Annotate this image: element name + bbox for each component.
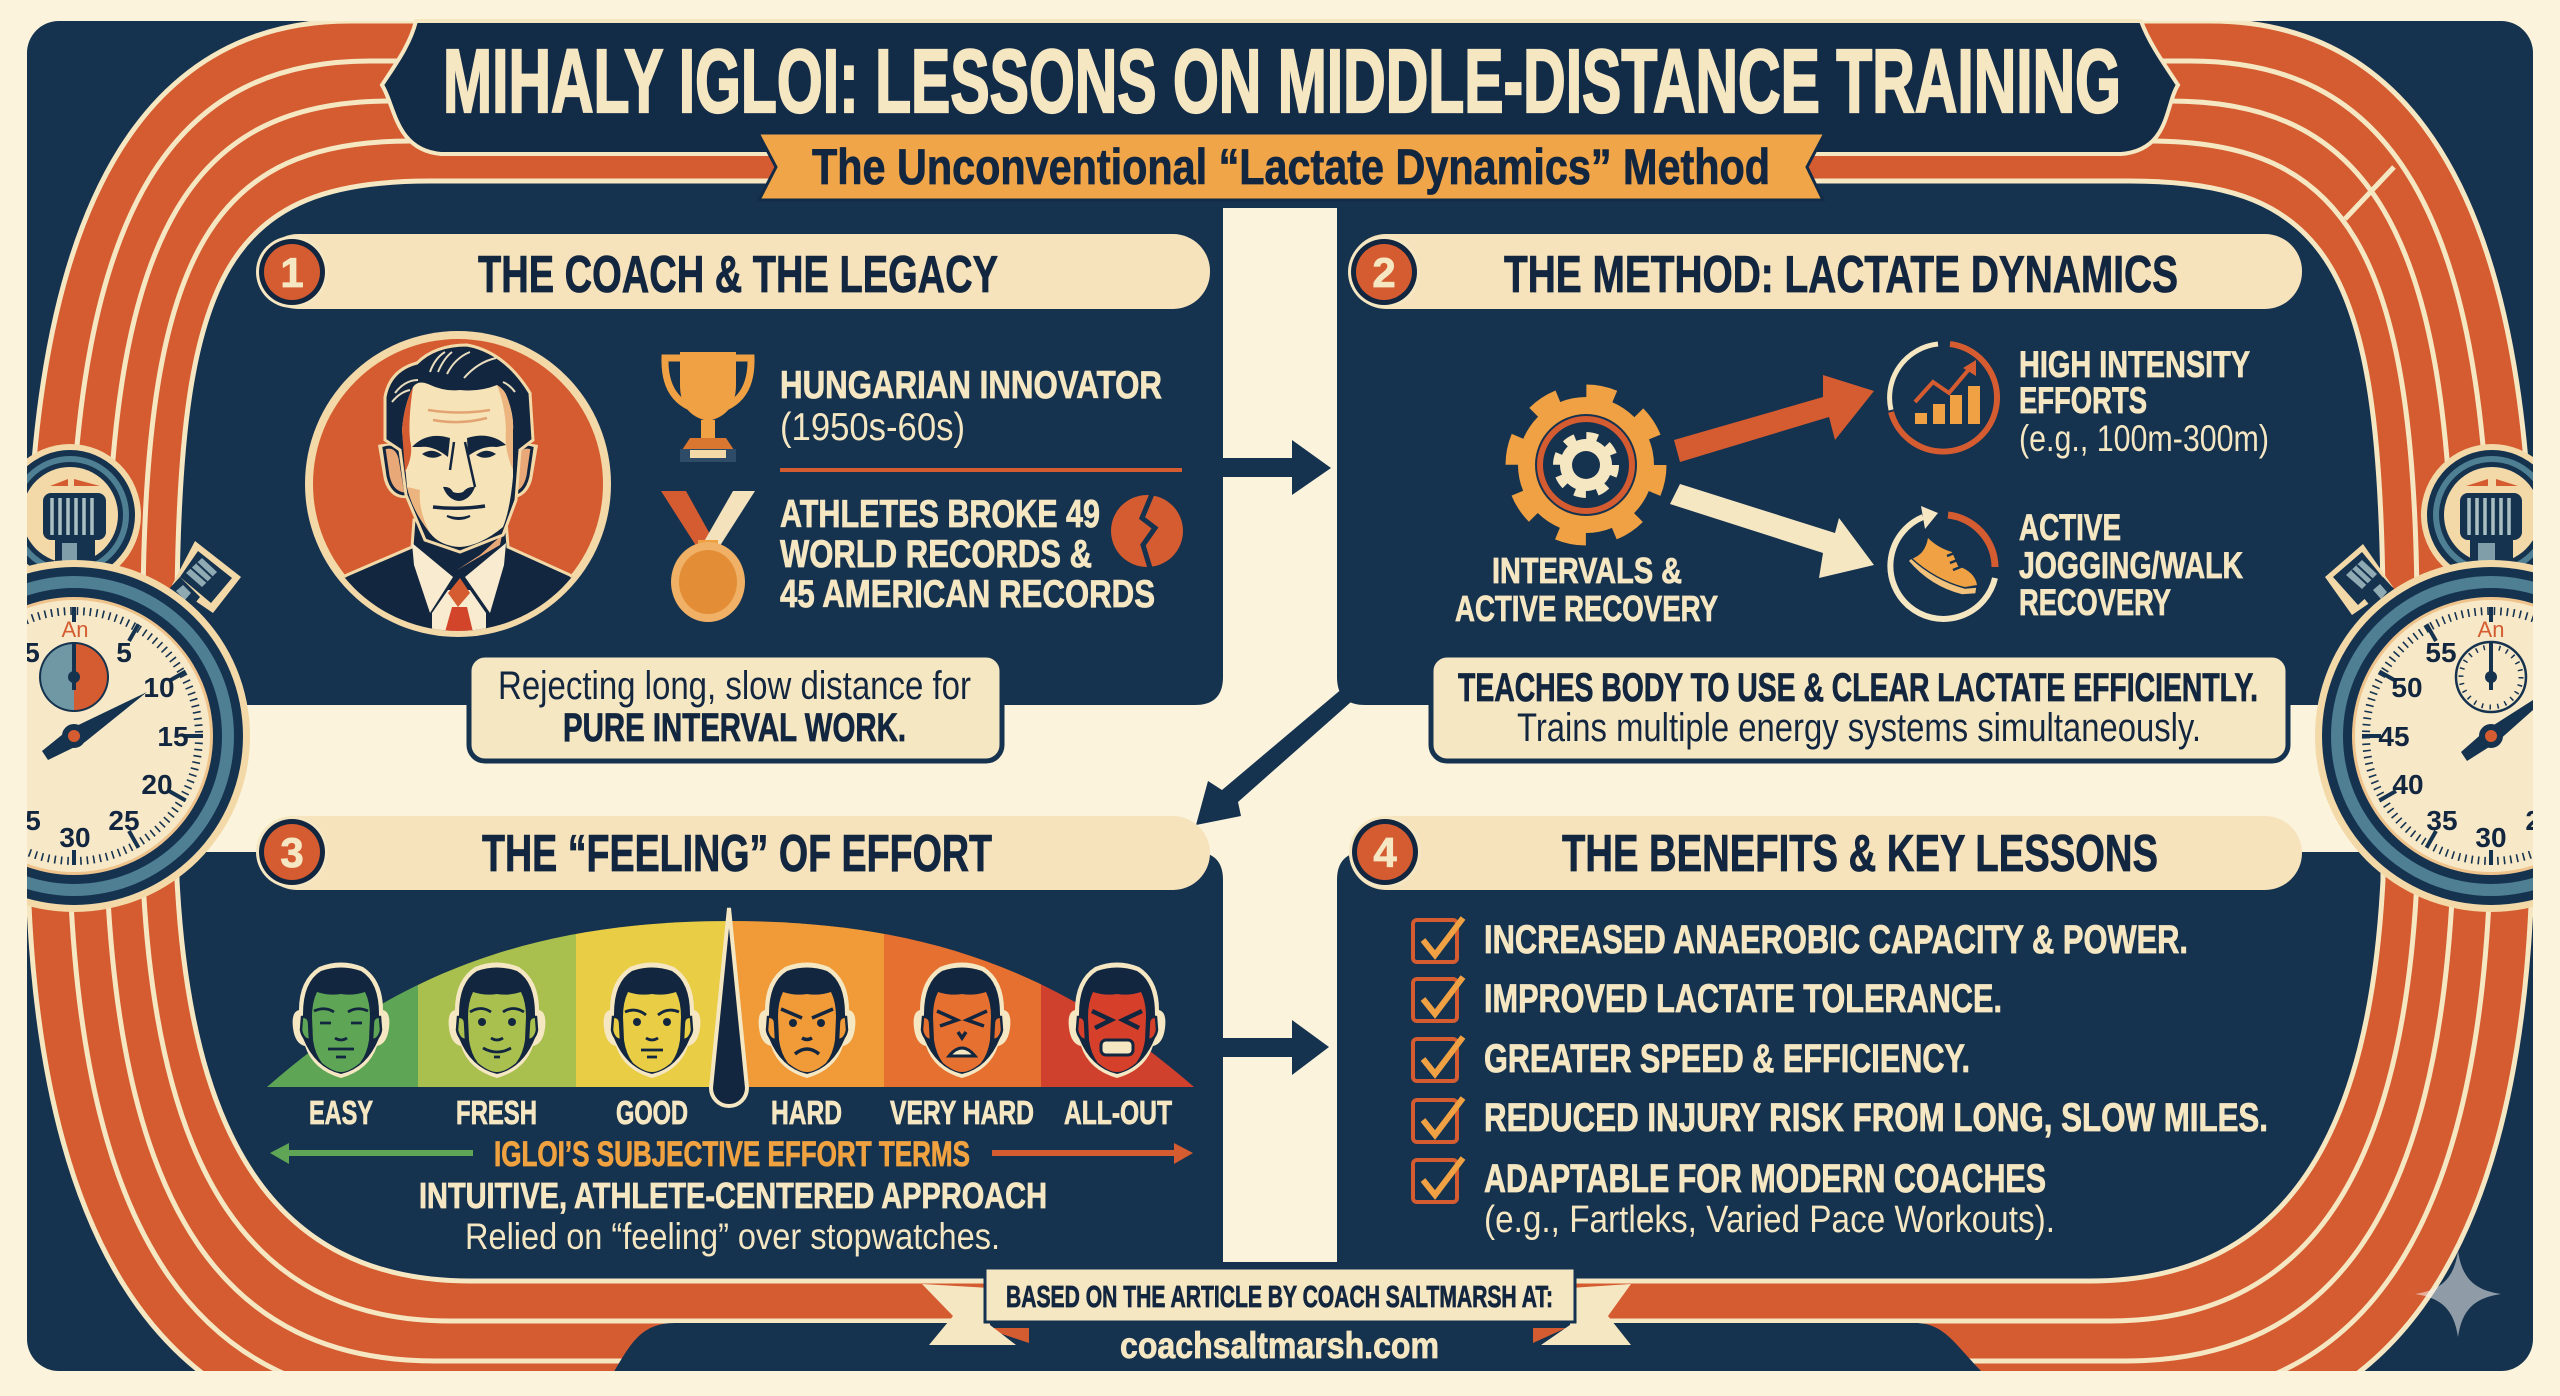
effort labels: ALL-OUT: [1064, 1094, 1172, 1131]
effort gauge: [267, 908, 1194, 1106]
title banner: [382, 21, 2178, 154]
dial numbers: 5: [24, 637, 40, 668]
gear caption: [1455, 550, 1718, 629]
callout: pure interval work: PURE INTERVAL WORK.: [563, 706, 906, 750]
benefit 5: (e.g., Fartleks, Varied Pace Workouts).: [1484, 1199, 2055, 1241]
text: high intensity efforts: HIGH INTENSITY: [2019, 344, 2250, 385]
callout: clear lactate: TEACHES BODY TO USE & CLEAR LACTATE EFFICIENTLY.: [1458, 666, 2258, 710]
divider rule: [780, 468, 1182, 472]
text: high intensity efforts: (e.g., 100m-300m): [2019, 418, 2269, 459]
callout: pure interval work: Rejecting long, slow distance for: [498, 664, 971, 708]
approach text: INTUITIVE, ATHLETE-CENTERED APPROACH: [419, 1175, 1047, 1216]
fact: records broken: WORLD RECORDS &: [780, 533, 1092, 576]
side button: [168, 541, 241, 613]
heading: section 1: 1: [280, 249, 304, 296]
dial numbers: 55: [2425, 637, 2457, 668]
text: active recovery: RECOVERY: [2019, 582, 2171, 623]
text: high intensity efforts: EFFORTS: [2019, 380, 2147, 421]
side button: [2325, 544, 2395, 615]
sparkle watermark: [2415, 1251, 2501, 1337]
subtitle ribbon: [758, 133, 1825, 200]
face: easy: [293, 962, 389, 1078]
dial numbers: 25: [2525, 805, 2557, 836]
cream cross divider: [170, 208, 2400, 1262]
panel: the method, lactate dynamics: [1337, 234, 2337, 764]
heading: section 1: THE COACH & THE LEGACY: [478, 246, 998, 304]
effort labels: GOOD: [616, 1094, 688, 1131]
dial numbers: 5: [116, 637, 132, 668]
heading: section 2: 2: [1372, 249, 1396, 296]
text: high intensity efforts: [2019, 344, 2269, 459]
panel: benefits and key lessons: [1337, 816, 2367, 1266]
arrow: easier: [270, 1143, 473, 1164]
dial numbers: 50: [2391, 672, 2423, 703]
arrow: to active recovery: [1670, 484, 1874, 578]
arrow: harder: [992, 1143, 1193, 1164]
callout: clear lactate: Trains multiple energy systems simultaneously.: [1517, 706, 2201, 750]
left stopwatch: [27, 444, 250, 912]
watch body: [27, 560, 250, 912]
fact: records broken: ATHLETES BROKE 49: [780, 493, 1100, 536]
dial numbers: 45: [2378, 721, 2410, 752]
benefit 3: GREATER SPEED & EFFICIENCY.: [1484, 1037, 1970, 1081]
portrait of Igloi: [305, 331, 611, 650]
text: active recovery: JOGGING/WALK: [2019, 545, 2243, 586]
arrow: to high intensity: [1674, 375, 1874, 462]
subtitle text: The Unconventional “Lactate Dynamics” Method: [812, 139, 1770, 195]
benefit 2: IMPROVED LACTATE TOLERANCE.: [1484, 977, 2002, 1021]
icon: gear: [1515, 394, 1657, 536]
dial numbers: 15: [157, 721, 189, 752]
dial numbers: 40: [2392, 769, 2424, 800]
gear caption: INTERVALS &: [1492, 550, 1682, 591]
sub dial: [39, 617, 109, 712]
footer ribbon: [922, 1268, 1631, 1366]
face: good: [604, 962, 700, 1078]
face: fresh: [449, 962, 545, 1078]
crown: [2421, 444, 2533, 566]
dial numbers: [2378, 643, 2533, 848]
panel: the coach and the legacy: [230, 234, 1223, 764]
ribbon panel: [985, 1268, 1575, 1322]
needle: [2461, 700, 2533, 761]
approach text: Relied on “feeling” over stopwatches.: [465, 1216, 1000, 1257]
fact: records broken: [780, 493, 1155, 616]
heading: section 4: 4: [1373, 829, 1397, 876]
approach text: [419, 1175, 1047, 1257]
heading: section 2: THE METHOD: LACTATE DYNAMICS: [1504, 246, 2178, 304]
needle: [42, 692, 147, 760]
dial numbers: 20: [141, 769, 173, 800]
dial numbers: 35: [2426, 805, 2458, 836]
right stopwatch: [2315, 444, 2533, 912]
text: active recovery: [2019, 507, 2243, 623]
icon: rising chart: [1890, 344, 1997, 452]
benefit 2: [1413, 977, 2002, 1021]
dial numbers: 30: [59, 822, 91, 853]
heading: section 1: [256, 234, 1210, 309]
scale caption: IGLOI’S SUBJECTIVE EFFORT TERMS: [494, 1135, 970, 1174]
icon: medal: [661, 491, 755, 622]
effort labels: [309, 1094, 1172, 1131]
gear caption: ACTIVE RECOVERY: [1455, 588, 1718, 629]
needle: [711, 908, 747, 1106]
benefit 3: [1413, 1037, 1970, 1081]
dial numbers: 25: [108, 805, 140, 836]
ribbon panel: BASED ON THE ARTICLE BY COACH SALTMARSH AT:: [1006, 1279, 1553, 1314]
benefit 5: ADAPTABLE FOR MODERN COACHES: [1484, 1157, 2046, 1201]
arrow: panel 2 to panel 3: [1196, 682, 1360, 825]
fact: Hungarian innovator: HUNGARIAN INNOVATOR: [780, 364, 1162, 407]
crown: [27, 444, 141, 566]
panel: the feeling of effort: [230, 816, 1223, 1266]
effort labels: VERY HARD: [890, 1094, 1034, 1131]
watch body: [2315, 560, 2533, 912]
icon: running shoe: [1890, 506, 1995, 619]
ribbon tails: [922, 1284, 1631, 1345]
heading: section 3: [256, 816, 1210, 890]
website: coachsaltmarsh.com: [1120, 1325, 1439, 1366]
dial numbers: [24, 637, 189, 853]
icon: broken record: [1111, 494, 1183, 568]
face: very hard: [914, 962, 1010, 1078]
face: hard: [759, 962, 855, 1078]
benefit 4: REDUCED INJURY RISK FROM LONG, SLOW MILES.: [1484, 1096, 2268, 1140]
heading: section 2: [1348, 234, 2302, 309]
sub dial: An: [2478, 617, 2504, 642]
sub dial: [2456, 617, 2526, 712]
heading: section 3: THE “FEELING” OF EFFORT: [482, 825, 992, 883]
face: all-out: [1069, 962, 1165, 1078]
callout: clear lactate: [1431, 655, 2288, 761]
text: active recovery: ACTIVE: [2019, 507, 2121, 548]
fact: Hungarian innovator: [780, 364, 1162, 449]
heading: section 3: 3: [280, 829, 304, 876]
heading: section 4: THE BENEFITS & KEY LESSONS: [1562, 825, 2158, 883]
benefit 5: [1413, 1157, 2055, 1241]
effort labels: EASY: [309, 1094, 373, 1131]
dial numbers: 10: [143, 672, 175, 703]
dial numbers: 5: [25, 805, 41, 836]
effort labels: HARD: [771, 1094, 842, 1131]
fact: records broken: 45 AMERICAN RECORDS: [780, 573, 1155, 616]
benefit 1: INCREASED ANAEROBIC CAPACITY & POWER.: [1484, 918, 2188, 962]
fact: Hungarian innovator: (1950s-60s): [780, 406, 965, 449]
icon: trophy: [665, 352, 751, 462]
callout: pure interval work: [469, 655, 1002, 761]
sub dial: An: [62, 617, 88, 642]
heading: section 4: [1349, 816, 2302, 890]
arrow: panel 1 to panel 2: [1223, 440, 1331, 495]
dial numbers: 30: [2475, 822, 2507, 853]
arrow: panel 3 to panel 4: [1223, 1020, 1329, 1075]
effort labels: FRESH: [456, 1094, 537, 1131]
